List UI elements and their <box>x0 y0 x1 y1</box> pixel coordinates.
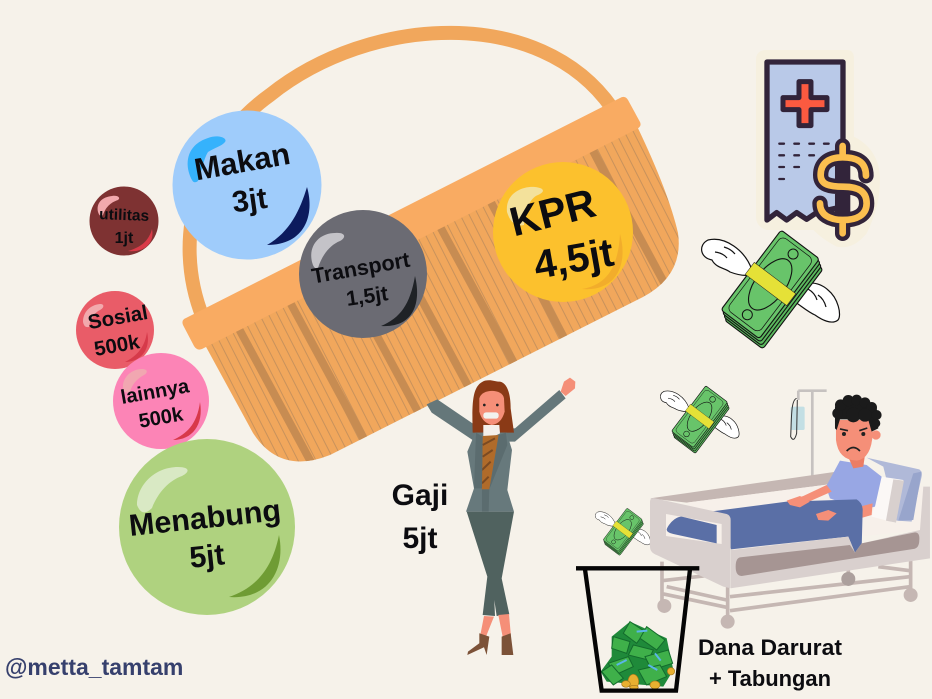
ball: Sosial <box>76 291 154 369</box>
blanket <box>710 499 863 553</box>
ball: KPR: KPR <box>505 180 600 245</box>
ball: Menabung: 5jt <box>188 538 226 575</box>
IV pole <box>791 390 827 490</box>
trousers <box>467 512 514 616</box>
torso <box>826 461 882 510</box>
hair <box>832 395 882 432</box>
ball: KPR: 4,5jt <box>531 231 617 288</box>
mattress inset <box>736 532 919 576</box>
dollar sign <box>820 146 867 233</box>
money pile <box>601 622 673 687</box>
hospital bed with patient <box>650 390 930 629</box>
arms <box>787 485 832 507</box>
receipt lines <box>779 144 829 179</box>
shoes <box>467 633 513 655</box>
face features <box>842 432 846 436</box>
icon: flying money small <box>595 508 650 556</box>
ball: lainnya <box>113 353 209 449</box>
side panel <box>731 487 930 588</box>
ball: utilitas: utilitas <box>99 206 149 225</box>
sheet <box>687 483 923 550</box>
ball: Transport <box>299 210 427 338</box>
ball: Sosial: Sosial <box>86 301 150 334</box>
ball: Sosial: 500k <box>92 330 142 361</box>
ball: Menabung: Menabung <box>127 493 283 543</box>
label: Dana Darurat + Tabungan: + Tabungan <box>709 666 831 691</box>
bin outline <box>576 568 699 691</box>
label: Gaji 5jt: Gaji <box>392 479 448 512</box>
head <box>836 420 873 461</box>
fist <box>561 378 575 396</box>
bed frame and wheels <box>657 557 918 629</box>
label: Dana Darurat + Tabungan <box>698 635 843 691</box>
ball: lainnya: 500k <box>137 403 186 433</box>
ball: KPR <box>493 162 633 302</box>
patient <box>787 395 882 518</box>
red cross <box>783 82 827 126</box>
arms <box>427 390 566 442</box>
ball: lainnya: lainnya <box>119 375 192 409</box>
trash bin with money <box>576 568 699 691</box>
receipt paper <box>767 62 843 220</box>
lower legs <box>480 614 511 637</box>
pillow <box>867 458 922 523</box>
lapels <box>474 433 507 512</box>
label: Dana Darurat + Tabungan: Dana Darurat <box>698 635 843 660</box>
face <box>479 391 505 425</box>
ball: utilitas <box>90 186 158 256</box>
ball: Makan: 3jt <box>230 182 269 219</box>
hair <box>472 380 514 433</box>
credit handle: @metta_tamtam <box>5 654 183 680</box>
label: Gaji 5jt: 5jt <box>402 522 438 555</box>
coins <box>622 668 675 689</box>
footboard <box>650 498 731 588</box>
woman figure <box>427 378 575 655</box>
basket handle <box>190 33 612 318</box>
ball: Makan <box>172 110 322 260</box>
far rail <box>650 472 837 503</box>
ball: Menabung <box>119 439 295 615</box>
receipt glow <box>756 50 880 247</box>
jacket <box>466 433 514 512</box>
ball: Transport: 1,5jt <box>345 282 390 311</box>
basket rim <box>182 97 641 350</box>
neck <box>847 455 865 468</box>
icon: flying money medium <box>660 385 739 453</box>
eyes and teeth <box>483 404 486 406</box>
basket <box>182 26 679 462</box>
ball: Makan: Makan <box>192 136 293 187</box>
basket body <box>206 128 679 462</box>
icon: medical receipt with dollar <box>756 50 880 247</box>
icon: flying money large <box>702 229 840 349</box>
collar and tie <box>483 425 500 438</box>
ball: utilitas: 1jt <box>115 230 134 247</box>
label: Gaji 5jt <box>392 479 448 555</box>
ball: Transport: Transport <box>310 248 412 289</box>
